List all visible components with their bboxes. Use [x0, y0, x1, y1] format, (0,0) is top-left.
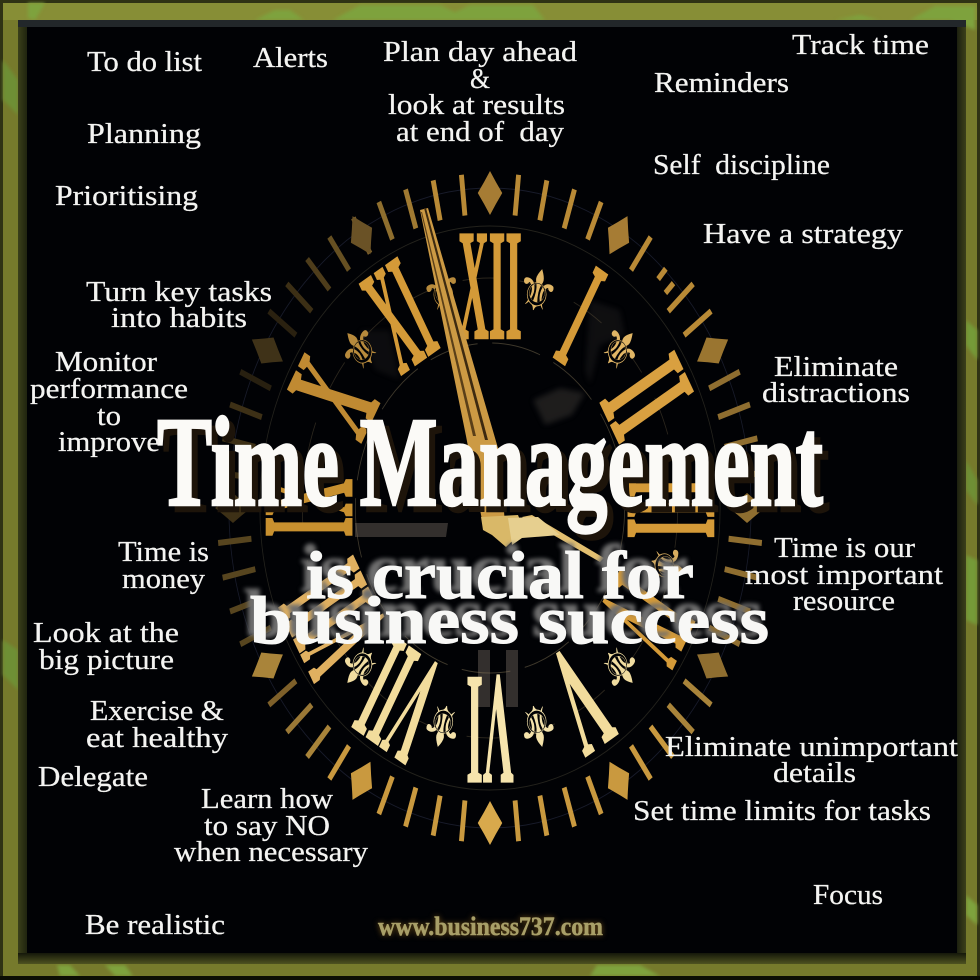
- fleur-de-lis ornaments: ⚜: [326, 307, 395, 391]
- tip: saying no: [174, 784, 368, 868]
- tip: distractions: distractions: [762, 378, 910, 409]
- minute ticks bottom: [267, 678, 713, 841]
- fleur-de-lis ornaments: ⚜: [510, 686, 565, 764]
- fleur-de-lis ornaments: ⚜: [415, 252, 470, 330]
- website credit: www.business737.com: [378, 912, 603, 941]
- fleur-de-lis ornaments: ⚜: [585, 625, 654, 709]
- tip: exercise: Exercise &: [90, 696, 224, 727]
- dial rings: [229, 188, 751, 828]
- clock illustration: [215, 171, 765, 845]
- tip: saying no: to say NO: [204, 811, 330, 842]
- background stains on clock face: [355, 300, 625, 707]
- tip: big picture: Look at the: [33, 618, 179, 649]
- roman numerals: VIII: [253, 536, 413, 702]
- roman numerals: III: [600, 478, 743, 538]
- tip: distractions: [762, 352, 910, 409]
- roman numerals: IX: [237, 479, 380, 537]
- tip: unimportant details: Eliminate unimportant: [665, 732, 958, 763]
- tip: unimportant details: [665, 732, 958, 789]
- fleur-de-lis ornaments: ⚜: [585, 307, 654, 391]
- minute ticks upper right: [351, 175, 713, 338]
- tip: monitor performance: [30, 347, 188, 458]
- tip: Track time: [792, 30, 929, 61]
- tip: Be realistic: [85, 910, 225, 941]
- tip: Focus: [813, 880, 883, 911]
- roman numerals: [237, 199, 743, 817]
- tip: To do list: [87, 47, 202, 78]
- roman numerals: I: [538, 236, 623, 396]
- tip: plan day ahead: look at results: [388, 90, 565, 121]
- roman numerals: XII: [458, 199, 522, 374]
- tip: money: money: [122, 564, 205, 595]
- tip: Prioritising: [55, 181, 198, 212]
- tip: Set time limits for tasks: [633, 796, 931, 827]
- fleur-de-lis ornaments: ⚜: [326, 625, 395, 709]
- tip: habits: [86, 277, 272, 334]
- tip: Delegate: [38, 762, 148, 793]
- clock hands: [420, 208, 604, 562]
- tip: Reminders: [654, 68, 789, 99]
- fleur-de-lis ornaments: ⚜: [415, 686, 470, 764]
- fleur-de-lis ornaments: ⚜: [635, 532, 699, 600]
- tip: distractions: Eliminate: [774, 352, 898, 383]
- minute ticks left, faded: [218, 235, 351, 647]
- tip: unimportant details: details: [773, 758, 856, 789]
- minute ticks right: [708, 369, 762, 647]
- subtitle line 1: is crucial for: [306, 537, 694, 613]
- roman numerals: IV: [573, 550, 721, 688]
- fleur-de-lis ornaments: [326, 252, 699, 764]
- tip: resource: resource: [793, 586, 895, 617]
- tip: monitor performance: improve: [58, 427, 160, 458]
- tip: monitor performance: Monitor: [55, 347, 158, 378]
- tip: money: Time is: [118, 537, 209, 568]
- tip: monitor performance: performance: [30, 374, 188, 405]
- tip: Alerts: [253, 43, 328, 74]
- tip: exercise: [86, 696, 228, 754]
- roman numerals: X: [262, 333, 405, 462]
- tip: exercise: eat healthy: [86, 723, 228, 754]
- tip: big picture: [33, 618, 179, 676]
- tip: saying no: Learn how: [201, 784, 334, 815]
- tip: Have a strategy: [703, 219, 903, 250]
- subtitle line 2: business success: [250, 582, 769, 658]
- tip: habits: Turn key tasks: [86, 277, 272, 308]
- tip: plan day ahead: [383, 37, 577, 148]
- tip: monitor performance: to: [97, 401, 121, 432]
- tip: big picture: big picture: [39, 645, 174, 676]
- tip: saying no: when necessary: [174, 837, 368, 868]
- hour diamonds: [215, 171, 765, 845]
- roman numerals: VI: [466, 642, 514, 817]
- tip: habits: into habits: [111, 303, 247, 334]
- roman numerals: II: [574, 331, 719, 463]
- tip: resource: [745, 533, 943, 617]
- tip: plan day ahead: at end of day: [396, 117, 564, 148]
- roman numerals: XI: [344, 226, 456, 406]
- tip: Planning: [87, 119, 201, 150]
- tip: plan day ahead: &: [470, 64, 490, 95]
- tip: resource: Time is our: [774, 533, 916, 564]
- roman numerals: V: [528, 613, 634, 789]
- tip: plan day ahead: Plan day ahead: [383, 37, 577, 68]
- clock dial in perspective: [215, 171, 765, 845]
- fleur-de-lis ornaments: ⚜: [510, 252, 565, 330]
- tip: Self discipline: [653, 150, 830, 181]
- tip: money: [118, 537, 209, 595]
- tip: resource: most important: [745, 560, 943, 591]
- roman numerals: VII: [336, 605, 463, 795]
